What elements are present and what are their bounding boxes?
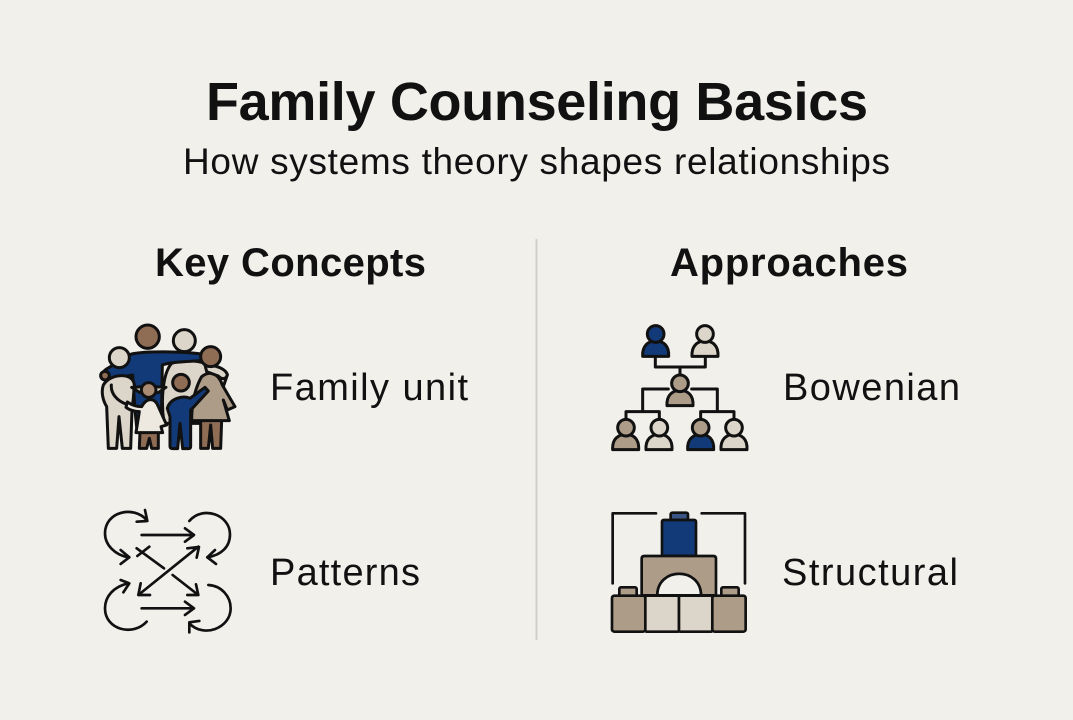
icon: family unit [101, 325, 235, 449]
label: structural: Structural [782, 552, 958, 594]
icon: bowenian genogram [613, 326, 747, 450]
title: Family Counseling Basics [206, 72, 868, 132]
subtitle: How systems theory shapes relationships [183, 141, 890, 182]
heading: approaches: Approaches [670, 241, 908, 285]
icon: structural blocks [612, 513, 746, 632]
icon: patterns [105, 510, 231, 632]
label: patterns: Patterns [270, 552, 420, 594]
label: bowenian: Bowenian [783, 367, 960, 409]
heading: key concepts: Key Concepts [155, 241, 426, 285]
label: family unit: Family unit [270, 367, 468, 409]
